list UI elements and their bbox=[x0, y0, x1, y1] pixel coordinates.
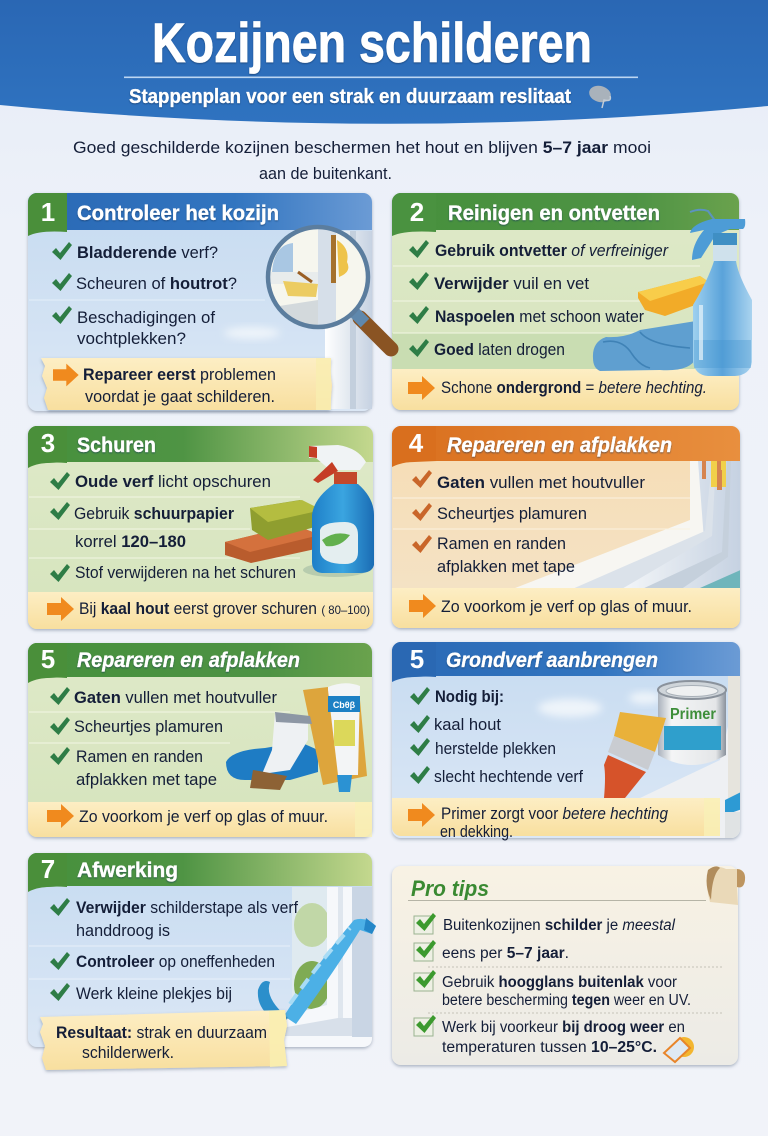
item: Gebruik ontvetter of verfreiniger bbox=[435, 242, 669, 260]
item bbox=[50, 898, 298, 940]
note: Zo voorkom je verf op glas of muur. bbox=[79, 808, 328, 826]
icon: filler supplies: Cbθβ bbox=[333, 700, 356, 710]
window frame bbox=[538, 676, 745, 838]
note bbox=[392, 369, 739, 410]
panel: step 7 afwerking bbox=[28, 853, 376, 1070]
item: Stof verwijderen na het schuren bbox=[75, 564, 296, 582]
window frame bbox=[325, 231, 372, 409]
item: Gaten vullen met houtvuller bbox=[437, 474, 646, 492]
note: Resultaat: strak en duurzaam bbox=[56, 1024, 267, 1042]
note: Bij kaal hout eerst grover schuren ( 80–100) bbox=[79, 600, 370, 618]
header bbox=[28, 643, 372, 683]
icon: peeling blue tape bbox=[258, 918, 376, 1024]
item: Scheuren of houtrot? bbox=[76, 275, 237, 293]
item: Scheurtjes plamuren bbox=[74, 718, 223, 736]
subtitle: Stappenplan voor een strak en duurzaam reslitaat bbox=[129, 86, 571, 108]
item: Gebruik schuurpapier bbox=[74, 505, 235, 523]
item: Verwijder vuil en vet bbox=[434, 275, 589, 293]
item: Ramen en randen bbox=[76, 748, 203, 766]
header banner bbox=[0, 0, 768, 124]
note: Schone ondergrond = betere hechting. bbox=[441, 379, 707, 397]
item: herstelde plekken bbox=[435, 740, 556, 758]
panel: step 5 repareren en afplakken bbox=[28, 643, 372, 837]
icon: sun and window bbox=[664, 1037, 694, 1062]
icon: primer can: Primer bbox=[670, 706, 716, 723]
note: Primer zorgt voor betere hechting bbox=[441, 805, 669, 823]
header bbox=[392, 642, 740, 682]
tip bbox=[414, 1015, 685, 1056]
item bbox=[410, 687, 504, 706]
panel: step 2 reinigen en ontvetten bbox=[392, 193, 752, 410]
icon: sanding sponges bbox=[225, 500, 322, 563]
item: handdroog is bbox=[76, 922, 170, 940]
tip: Gebruik hoogglans buitenlak voor bbox=[442, 974, 677, 991]
item: vochtplekken? bbox=[77, 330, 186, 348]
tip bbox=[414, 970, 691, 1009]
note bbox=[28, 802, 372, 837]
tip: eens per 5–7 jaar. bbox=[442, 945, 569, 962]
header: 1 bbox=[41, 197, 55, 227]
header: Reinigen en ontvetten bbox=[448, 202, 660, 225]
item: Goed laten drogen bbox=[434, 341, 565, 359]
rows bbox=[29, 497, 300, 558]
note: Repareer eerst problemen bbox=[83, 366, 276, 384]
header: Controleer het kozijn bbox=[77, 202, 279, 225]
tip: Buitenkozijnen schilder je meestal bbox=[443, 917, 676, 934]
intro text: Goed geschilderde kozijnen beschermen het hout en blijven 5–7 jaar mooi bbox=[73, 138, 651, 157]
header bbox=[28, 853, 372, 892]
tip: temperaturen tussen 10–25°C. bbox=[442, 1039, 657, 1056]
icon: spray bottle blue bbox=[303, 445, 374, 577]
tip: Werk bij voorkeur bij droog weer en bbox=[442, 1019, 685, 1036]
item bbox=[52, 306, 215, 348]
header: 5 bbox=[41, 644, 55, 674]
icon: blue cloth bbox=[593, 321, 696, 371]
note bbox=[392, 798, 720, 841]
item: Werk kleine plekjes bij bbox=[76, 985, 232, 1003]
heading: Pro tips bbox=[411, 876, 489, 901]
panel: step 3 schuren bbox=[28, 426, 374, 629]
item bbox=[50, 747, 217, 789]
item: Naspoelen met schoon water bbox=[435, 308, 644, 326]
note bbox=[28, 592, 373, 629]
item: Gaten vullen met houtvuller bbox=[74, 689, 277, 707]
note bbox=[392, 588, 740, 628]
icon: spray bottle bbox=[690, 210, 752, 376]
note: voordat je gaat schilderen. bbox=[85, 388, 275, 406]
cloud bbox=[224, 327, 280, 339]
item bbox=[412, 535, 575, 576]
header: 5 bbox=[410, 644, 424, 674]
header bbox=[392, 426, 740, 467]
header: 7 bbox=[41, 854, 55, 884]
icon: paint brush bbox=[604, 712, 666, 798]
note bbox=[40, 1010, 287, 1070]
note: schilderwerk. bbox=[82, 1044, 174, 1062]
note: en dekking. bbox=[440, 823, 513, 841]
icon: magnifier bbox=[266, 225, 391, 349]
title: Kozijnen schilderen bbox=[152, 11, 592, 74]
header: Repareren en afplakken bbox=[77, 649, 300, 672]
header: Repareren en afplakken bbox=[447, 434, 672, 457]
header bbox=[392, 193, 739, 236]
intro text bbox=[73, 138, 651, 183]
item: Ramen en randen bbox=[437, 535, 566, 553]
item: afplakken met tape bbox=[437, 558, 575, 576]
item: Scheurtjes plamuren bbox=[437, 505, 587, 523]
icon: primer can bbox=[658, 681, 726, 765]
item bbox=[50, 502, 235, 551]
item: slecht hechtende verf bbox=[434, 768, 583, 786]
item: Verwijder schilderstape als verf bbox=[76, 899, 298, 917]
item: Oude verf licht opschuren bbox=[75, 473, 271, 491]
window frame bbox=[510, 461, 745, 590]
item: Beschadigingen of bbox=[77, 309, 215, 327]
item: Controleer op oneffenheden bbox=[76, 953, 275, 971]
header: Schuren bbox=[77, 434, 156, 457]
panel: step 1 controleer het kozijn bbox=[28, 193, 372, 411]
header: 4 bbox=[409, 428, 424, 458]
item: Bladderende verf? bbox=[77, 244, 218, 262]
item: Nodig bij: bbox=[435, 688, 504, 706]
header: Grondverf aanbrengen bbox=[446, 649, 658, 672]
header bbox=[28, 193, 372, 236]
intro text: aan de buitenkant. bbox=[259, 164, 392, 183]
window with tree bbox=[270, 887, 372, 1047]
header: 2 bbox=[410, 197, 424, 227]
item: afplakken met tape bbox=[76, 771, 217, 789]
header: Afwerking bbox=[77, 859, 178, 882]
icon: cork note holder bbox=[707, 866, 745, 905]
icon: filler supplies bbox=[226, 683, 367, 792]
panel: step 4 repareren en afplakken bbox=[392, 426, 745, 628]
tip bbox=[414, 940, 569, 962]
icon: sponge bbox=[638, 276, 709, 316]
tip: betere bescherming tegen weer en UV. bbox=[442, 992, 691, 1009]
header bbox=[28, 426, 373, 468]
rows bbox=[392, 266, 739, 369]
panel: step 5 grondverf aanbrengen bbox=[392, 642, 745, 841]
note: Zo voorkom je verf op glas of muur. bbox=[441, 598, 692, 616]
icon: paint roller bbox=[587, 83, 613, 108]
item: kaal hout bbox=[434, 716, 501, 734]
note bbox=[41, 358, 332, 410]
panel: pro tips bbox=[392, 866, 745, 1065]
item: korrel 120–180 bbox=[75, 533, 186, 551]
header: 3 bbox=[41, 428, 55, 458]
item bbox=[410, 715, 501, 734]
